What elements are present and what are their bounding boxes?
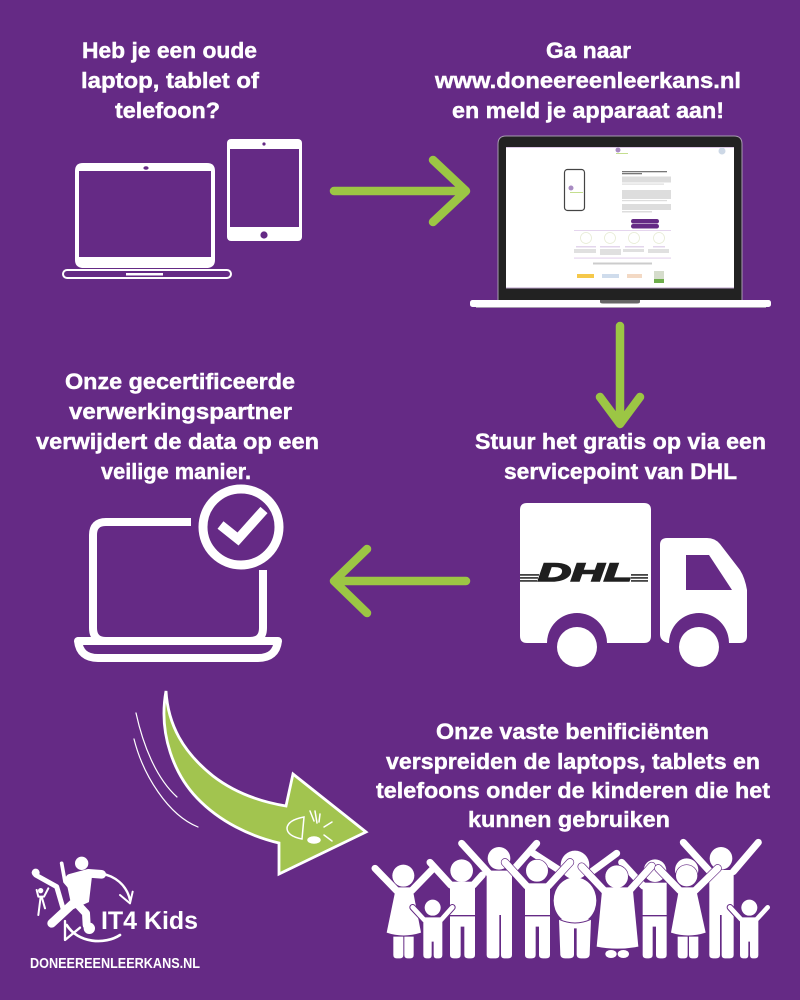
icon: DHL truck — [520, 503, 747, 667]
person: woman left — [375, 865, 433, 958]
heading: send via DHL: servicepoint van DHL — [504, 459, 737, 484]
screenshot: partner logos — [577, 271, 664, 283]
arrow: right to website — [334, 160, 466, 222]
heading: send via DHL — [475, 429, 766, 484]
arrow: down to DHL — [600, 326, 640, 424]
truck cab — [660, 538, 747, 643]
icon: tablet — [227, 139, 302, 241]
heading: certified partner removes data: Onze gecertificeerde — [65, 369, 295, 394]
heading: go to website: Ga naar — [546, 38, 631, 63]
speed lines — [134, 713, 198, 827]
megaphone glyph — [287, 811, 332, 843]
arrow body — [164, 691, 366, 874]
check circle — [203, 489, 279, 565]
heading: certified partner removes data — [36, 369, 319, 484]
check mark — [220, 510, 264, 539]
screenshot: feature circles — [574, 230, 671, 264]
logo: IT4Kids — [30, 857, 200, 972]
laptop lid — [93, 522, 263, 641]
heading: certified partner removes data: veilige manier. — [101, 459, 251, 484]
heading: beneficiaries distribute: telefoons onder de kinderen die het — [376, 778, 771, 803]
person: heavy man — [533, 851, 617, 958]
icon: laptop outline — [63, 163, 231, 278]
heading: go to website — [434, 38, 741, 123]
truck cargo box — [520, 503, 651, 643]
arrow: left to laptop — [334, 549, 466, 613]
heading: send via DHL: Stuur het gratis op via een — [475, 429, 766, 454]
screenshot: site logo — [616, 148, 726, 154]
screenshot: body text — [622, 171, 671, 212]
heading: beneficiaries distribute — [376, 719, 771, 832]
person: tall man right — [683, 842, 758, 958]
laptop base — [78, 641, 278, 658]
DHL logo — [520, 559, 648, 587]
heading: old device question: telefoon? — [115, 98, 220, 123]
logo recycle arrows — [100, 873, 130, 900]
person: woman long dress — [582, 865, 652, 958]
heading: old device question — [81, 38, 260, 123]
truck window — [686, 555, 732, 590]
person: woman right — [658, 858, 718, 958]
person: man third — [505, 859, 570, 958]
heading: old device question: laptop, tablet of — [81, 68, 260, 93]
person: tall man — [462, 843, 537, 958]
heading: old device question: Heb je een oude — [82, 38, 257, 63]
heading: beneficiaries distribute: Onze vaste benificiënten — [436, 719, 709, 744]
logo figures — [32, 857, 133, 941]
logo url: DONEEREENLEERKANS.NL — [30, 956, 200, 972]
truck wheels — [557, 627, 719, 667]
person: man fourth — [622, 859, 667, 958]
heading: certified partner removes data: verwerkingspartner — [69, 399, 292, 424]
screenshot: phone — [564, 170, 584, 210]
icon: macbook with website screenshot — [470, 136, 771, 308]
heading: beneficiaries distribute: verspreiden de laptops, tablets en — [386, 749, 760, 774]
person: small child left — [413, 900, 452, 958]
heading: certified partner removes data: verwijdert de data op een — [36, 429, 319, 454]
person: man second — [430, 859, 482, 958]
illustration: group of people cheering — [375, 842, 768, 958]
DHL logo: DHL — [538, 559, 632, 587]
icon: laptop and tablet — [63, 139, 302, 278]
person: small child right — [730, 900, 768, 958]
icon: laptop with check mark — [78, 489, 279, 658]
screenshot: purple buttons — [631, 219, 659, 228]
heading: beneficiaries distribute: kunnen gebruiken — [468, 807, 670, 832]
arrow: curved green arrow with megaphone — [134, 691, 366, 874]
heading: go to website: en meld je apparaat aan! — [452, 98, 724, 123]
logo wordmark: IT4 Kids — [101, 907, 198, 935]
heading: go to website: www.doneereenleerkans.nl — [434, 68, 741, 93]
